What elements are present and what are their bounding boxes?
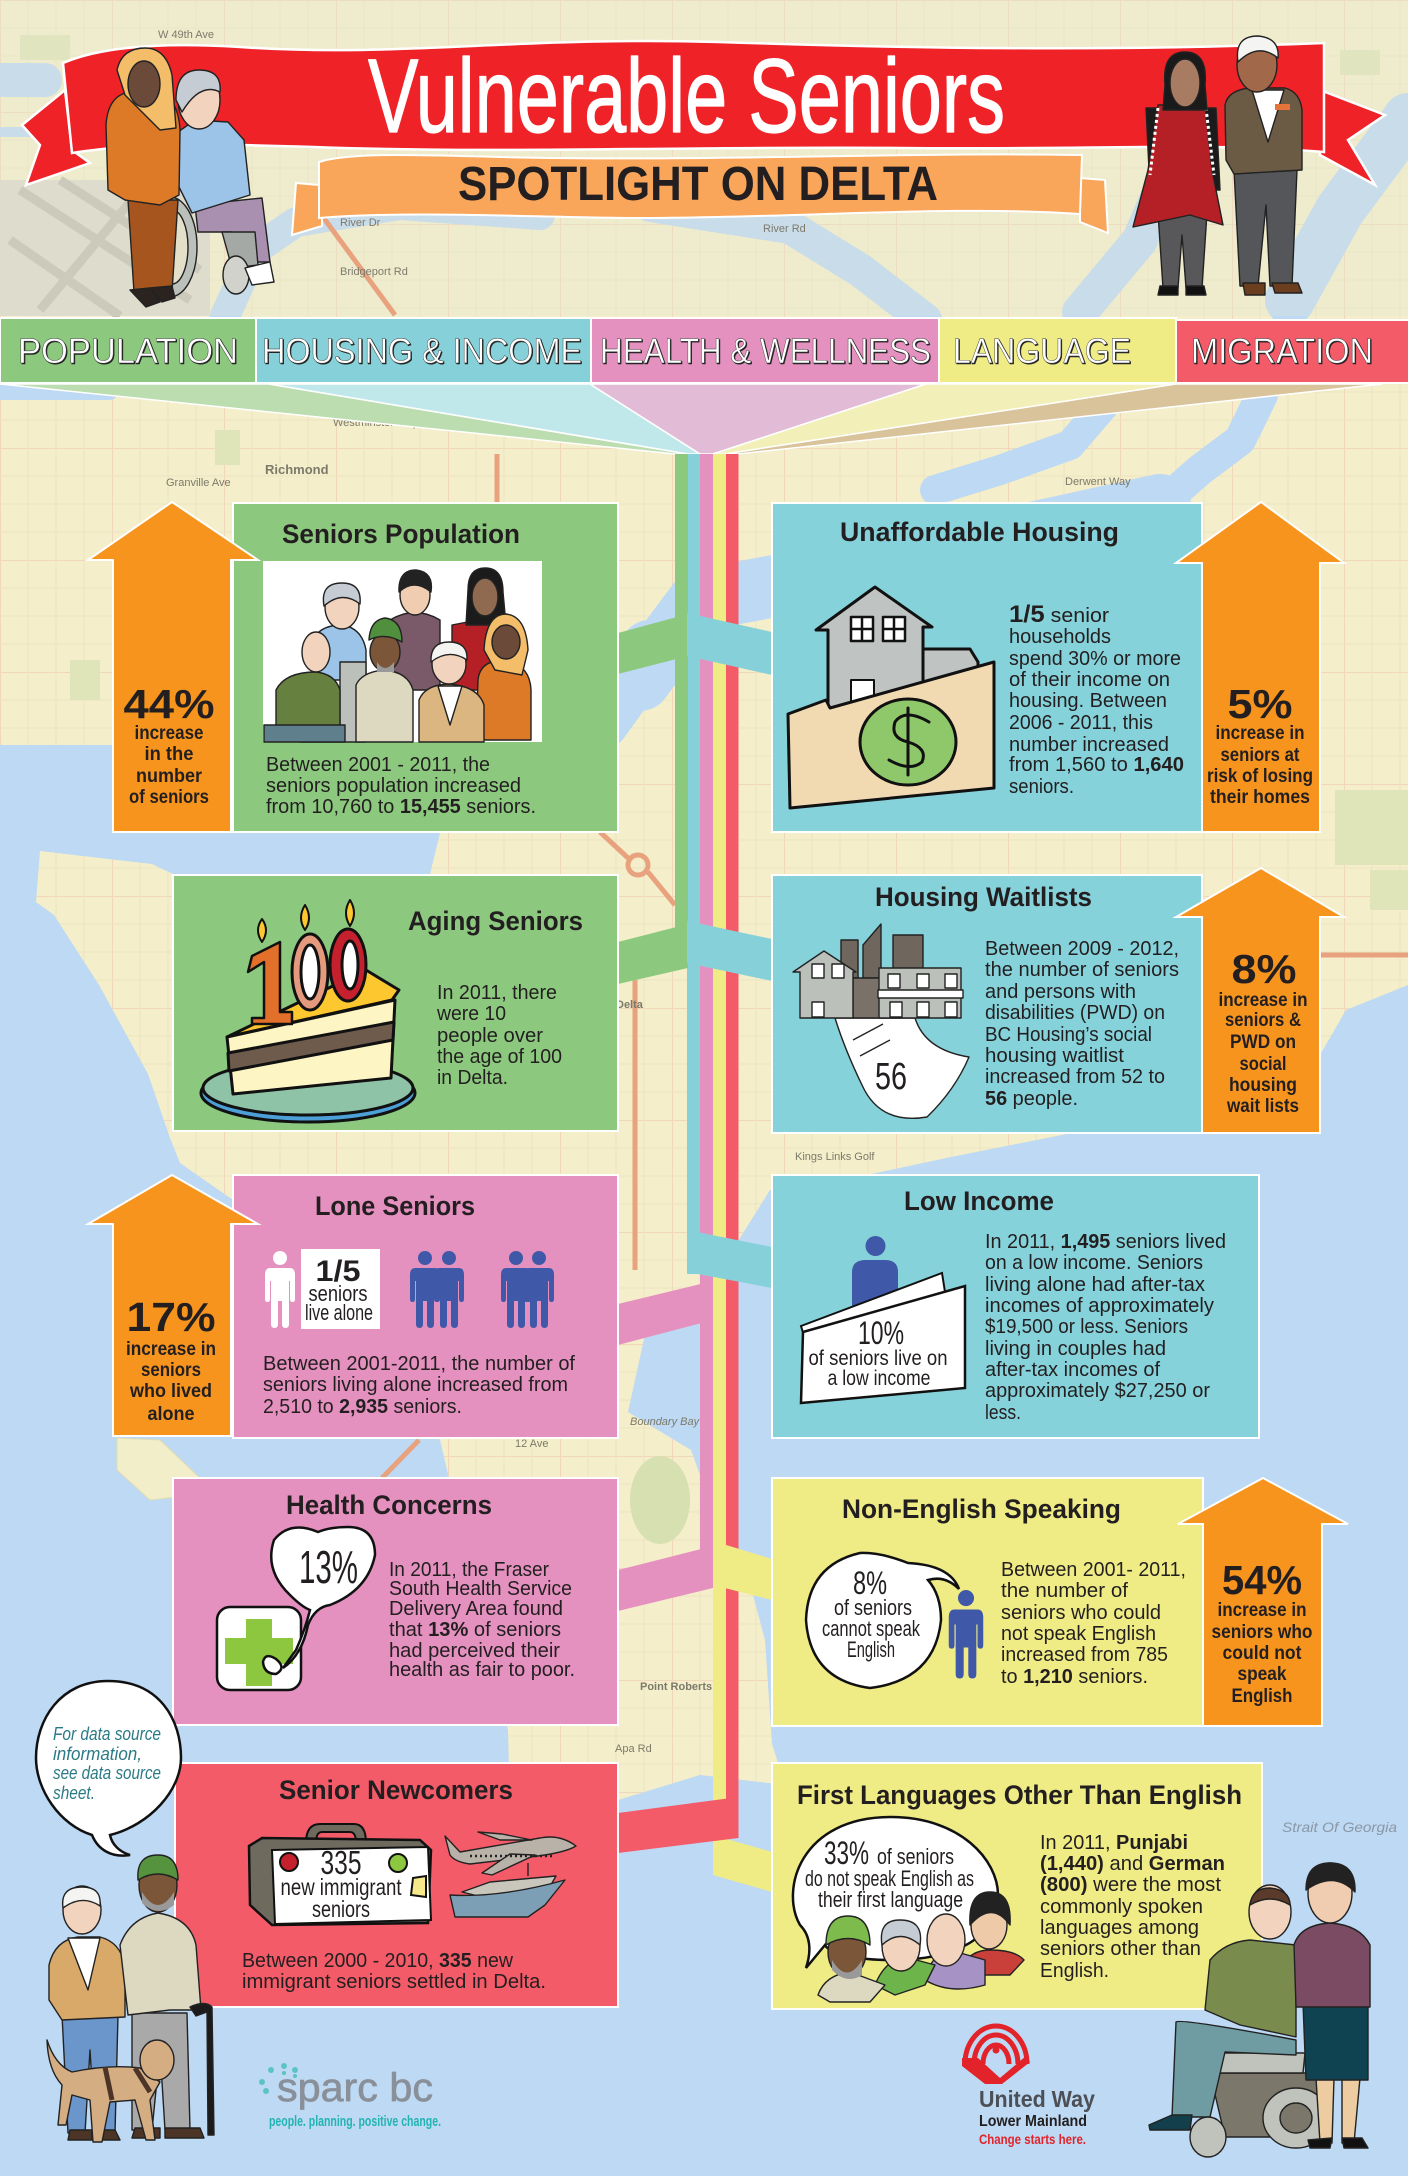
icon: one in five seniors: live alone: [305, 1300, 373, 1325]
body text: languages among: [1040, 1917, 1199, 1939]
body text: 1/5 senior: [1009, 601, 1109, 628]
body text: [389, 1559, 575, 1681]
category: population: POPULATION: [18, 332, 238, 371]
body text: housing waitlist: [985, 1045, 1124, 1067]
body text: [985, 938, 1179, 1110]
panel: Non-English Speaking: [772, 1478, 1203, 1726]
heading: Housing Waitlists: [875, 882, 1092, 912]
body text: living alone had after-tax: [985, 1274, 1205, 1296]
speech bubble with heads: their first language: [818, 1887, 963, 1912]
body text: less.: [985, 1402, 1021, 1424]
body text: the number of seniors: [985, 959, 1179, 981]
body text: Delivery Area found: [389, 1598, 563, 1620]
icon: one in five seniors: 1/5: [316, 1255, 360, 1288]
icon: person behind wallet: a low income: [828, 1367, 930, 1390]
arrow: 8% increase: 8%: [1232, 946, 1296, 992]
body text: that 13% of seniors: [389, 1619, 561, 1641]
body text: had perceived their: [389, 1640, 560, 1662]
arrow: 17% increase: increase in: [126, 1339, 216, 1360]
body text: disabilities (PWD) on: [985, 1002, 1165, 1024]
heading: Unaffordable Housing: [840, 517, 1119, 547]
body text: number increased: [1009, 734, 1169, 756]
body text: of their income on: [1009, 669, 1170, 691]
arrow: 8% increase: social: [1240, 1054, 1286, 1075]
speech bubble with heads: 33%: [824, 1835, 869, 1871]
fan connectors from categories to trunk: [0, 384, 1382, 454]
body text: 56 people.: [985, 1088, 1078, 1110]
body text: incomes of approximately: [985, 1295, 1214, 1317]
illustration: man with guide dog: [49, 1886, 125, 2140]
body text: $19,500 or less. Seniors: [985, 1316, 1188, 1338]
body text: [263, 1353, 575, 1418]
heading: Low Income: [904, 1186, 1054, 1216]
map background: Apa Rd: [615, 1743, 652, 1755]
body text: were 10: [436, 1003, 506, 1025]
body text: and persons with: [985, 981, 1136, 1003]
icon: heart speech bubble: 13%: [299, 1541, 358, 1593]
body text: seniors who could: [1001, 1602, 1161, 1624]
arrow: 54% increase: speak: [1238, 1664, 1287, 1685]
body text: seniors population increased: [266, 775, 521, 797]
icon: person behind wallet: [801, 1236, 965, 1403]
body text: living in couples had: [985, 1338, 1166, 1360]
map background: Kings Links Golf: [795, 1151, 875, 1163]
icon: suitcase: 335: [320, 1844, 362, 1881]
arrow: 54% increase: increase in: [1218, 1600, 1306, 1621]
arrow: 5% increase: 5%: [1228, 681, 1292, 727]
arrow: 54% increase: 54%: [1222, 1557, 1302, 1603]
central colour trunk: [675, 454, 738, 1875]
panel: Housing Waitlists: [772, 875, 1202, 1133]
body text: seniors other than: [1040, 1938, 1201, 1960]
category: health and wellness: [591, 318, 939, 383]
arrow: 8% increase: [1176, 868, 1344, 1133]
icon: homes and waitlist paper: 56: [875, 1056, 907, 1098]
icon: speech bubble: English: [847, 1637, 895, 1662]
body text: from 1,560 to 1,640: [1009, 754, 1184, 776]
body text: households: [1009, 626, 1111, 648]
title: Vulnerable Seniors: [368, 38, 1005, 155]
arrow: 17% increase: 17%: [126, 1294, 216, 1340]
arrow: 5% increase: increase in: [1216, 723, 1304, 744]
arrow: 8% increase: seniors &: [1225, 1010, 1301, 1031]
arrow: 8% increase: PWD on: [1230, 1032, 1296, 1053]
arrow: 44% increase: [88, 502, 258, 832]
category: health and wellness: HEALTH & WELLNESS: [600, 332, 931, 371]
arrow: 8% increase: increase in: [1218, 990, 1308, 1011]
icon: ship: [450, 1863, 565, 1917]
body text: increased from 785: [1001, 1644, 1168, 1666]
map background: Boundary Bay: [630, 1416, 701, 1428]
logo: United Way: [962, 2026, 1095, 2147]
group illustration: [263, 561, 542, 742]
body text: commonly spoken: [1040, 1896, 1203, 1918]
arrow: 44% increase: in the: [144, 744, 194, 765]
body text: seniors.: [1009, 776, 1074, 798]
panel: First Languages Other Than English: [772, 1763, 1262, 2009]
illustration: woman in red vest: [1133, 52, 1223, 295]
map background: Delta: [616, 999, 644, 1011]
icon: airplane: [445, 1832, 576, 1875]
map background: Richmond: [265, 462, 329, 477]
heading: Health Concerns: [286, 1490, 492, 1520]
branch connectors: [618, 613, 772, 1892]
callout: data source note: sheet.: [53, 1783, 95, 1803]
body text: spend 30% or more: [1009, 648, 1181, 670]
body text: health as fair to poor.: [389, 1659, 575, 1681]
icon: house in wallet: [788, 587, 994, 808]
body text: housing. Between: [1009, 690, 1167, 712]
map background: Strait Of Georgia: [1282, 1819, 1397, 1835]
illustration: woman in wheelchair: [143, 70, 274, 297]
body text: Between 2000 - 2010, 335 new: [242, 1950, 514, 1972]
map background: 12 Ave: [515, 1438, 548, 1450]
speech bubble with heads: of seniors: [877, 1844, 954, 1869]
body text: [985, 1231, 1226, 1424]
arrow: 8% increase: housing: [1229, 1075, 1297, 1096]
red title banner: [22, 38, 1385, 185]
panel: Aging Seniors: [173, 875, 618, 1131]
body text: [436, 982, 562, 1089]
arrow: 44% increase: number: [136, 766, 203, 787]
body text: the age of 100: [437, 1046, 562, 1068]
arrow: 17% increase: alone: [148, 1404, 194, 1425]
category: housing and income: [256, 318, 591, 383]
heading: Senior Newcomers: [279, 1775, 513, 1805]
illustration: woman in hijab: [106, 48, 180, 307]
callout: data source note: For data source: [53, 1724, 161, 1744]
category bars: [0, 318, 1408, 383]
icon: speech bubble: [806, 1553, 959, 1688]
arrow: 5% increase: risk of losing: [1207, 766, 1313, 787]
body text: approximately $27,250 or: [985, 1380, 1210, 1402]
map background: Westminster Hwy: [333, 417, 419, 429]
logo: United Way: Lower Mainland: [979, 2113, 1087, 2130]
body text: seniors living alone increased from: [263, 1374, 568, 1396]
map background: Bridgeport Rd: [340, 266, 408, 278]
icon: one in five seniors: seniors: [308, 1281, 368, 1306]
speech bubble with heads: [793, 1817, 1024, 2002]
icon: person: [949, 1590, 983, 1679]
panel: Lone Seniors: [233, 1175, 618, 1438]
icon: medical box: [217, 1607, 301, 1690]
map background: Derwent Way: [1065, 476, 1131, 488]
body text: immigrant seniors settled in Delta.: [242, 1971, 546, 1993]
icon: homes and waitlist paper: [793, 924, 969, 1118]
arrow: 54% increase: English: [1232, 1686, 1292, 1707]
body text: Between 2001- 2011,: [1001, 1559, 1186, 1581]
body text: [1001, 1559, 1186, 1688]
heading: First Languages Other Than English: [797, 1780, 1242, 1810]
body text: on a low income. Seniors: [985, 1252, 1203, 1274]
arrow: 44% increase: of seniors: [129, 787, 209, 808]
map background: River Dr: [340, 217, 381, 229]
body text: In 2011, there: [437, 982, 557, 1004]
arrow: 8% increase: wait lists: [1226, 1096, 1299, 1117]
body text: English.: [1040, 1960, 1109, 1982]
category: population: [0, 318, 256, 383]
icon: suitcase: new immigrant: [280, 1874, 402, 1900]
body text: 2,510 to 2,935 seniors.: [263, 1396, 462, 1418]
subtitle: SPOTLIGHT ON DELTA: [458, 158, 938, 211]
body text: not speak English: [1001, 1623, 1156, 1645]
body text: increased from 52 to: [985, 1066, 1165, 1088]
callout: data source note: see data source: [53, 1763, 161, 1783]
logo: United Way: United Way: [979, 2086, 1095, 2112]
category: migration: MIGRATION: [1191, 332, 1373, 371]
body text: In 2011, 1,495 seniors lived: [985, 1231, 1226, 1253]
category: migration: [1176, 320, 1408, 383]
panel: Low Income: [772, 1175, 1259, 1438]
illustration: man in power wheelchair: [1149, 1885, 1329, 2157]
illustration: guide dog: [47, 2040, 174, 2142]
body text: (800) were the most: [1040, 1874, 1221, 1896]
logo: United Way: Change starts here.: [979, 2132, 1086, 2147]
icon: suitcase: seniors: [312, 1896, 370, 1922]
map background: Point Roberts: [640, 1681, 712, 1693]
map background: River Rd: [763, 223, 806, 235]
illustration: woman in purple sweater: [1294, 1863, 1370, 2148]
orange subtitle banner: [292, 154, 1108, 235]
panel: Unaffordable Housing: [772, 503, 1202, 832]
body text: [242, 1950, 546, 1993]
logo: sparc bc: sparc bc: [277, 2066, 433, 2110]
arrow: 17% increase: [88, 1175, 258, 1436]
callout: data source note: information,: [53, 1744, 142, 1764]
illustration: man in brown cardigan: [1225, 36, 1302, 295]
icon: person behind wallet: 10%: [858, 1315, 904, 1351]
icon: suitcase: [249, 1824, 431, 1925]
icon: speech bubble: cannot speak: [822, 1616, 921, 1641]
heading: Lone Seniors: [315, 1191, 475, 1221]
icon: speech bubble: of seniors: [834, 1595, 912, 1620]
body text: [1040, 1832, 1225, 1982]
illustration: man with turban and cane: [120, 1855, 214, 2138]
arrow: 17% increase: who lived: [129, 1381, 212, 1402]
body text: BC Housing’s social: [985, 1024, 1152, 1046]
body text: [266, 754, 536, 818]
panel: Seniors Population: [233, 503, 618, 832]
body text: 2006 - 2011, this: [1009, 712, 1153, 734]
category: language: LANGUAGE: [953, 332, 1131, 371]
logo: sparc bc: people. planning. positive change.: [269, 2113, 441, 2130]
category: housing and income: HOUSING & INCOME: [262, 332, 582, 371]
body text: Between 2001 - 2011, the: [266, 754, 490, 776]
icon: birthday cake: [201, 900, 415, 1122]
body text: (1,440) and German: [1040, 1853, 1225, 1875]
arrow: 5% increase: their homes: [1210, 787, 1310, 808]
arrow: 5% increase: seniors at: [1220, 745, 1300, 766]
body text: in Delta.: [437, 1067, 508, 1089]
arrow: 54% increase: [1178, 1478, 1348, 1726]
body text: South Health Service: [389, 1578, 572, 1600]
arrow: 44% increase: increase: [134, 723, 204, 744]
icon: person behind wallet: of seniors live on: [808, 1347, 948, 1370]
arrow: 54% increase: seniors who: [1212, 1622, 1312, 1643]
speech bubble with heads: do not speak English as: [805, 1866, 974, 1891]
heading: Seniors Population: [282, 519, 520, 549]
heading: Non-English Speaking: [842, 1494, 1121, 1524]
heading: Aging Seniors: [408, 906, 583, 936]
body text: after-tax incomes of: [985, 1359, 1160, 1381]
icon: heart speech bubble: [271, 1527, 375, 1668]
body text: Between 2009 - 2012,: [985, 938, 1179, 960]
panel: Health Concerns: [173, 1478, 618, 1725]
body text: [1009, 601, 1184, 798]
body text: In 2011, the Fraser: [389, 1559, 549, 1581]
arrow: 17% increase: seniors: [141, 1360, 201, 1381]
panel: Senior Newcomers: [175, 1763, 618, 2007]
arrow: 44% increase: 44%: [124, 681, 214, 727]
arrow: 5% increase: [1176, 502, 1344, 832]
logo: sparc bc: [259, 2063, 441, 2130]
body text: to 1,210 seniors.: [1001, 1666, 1148, 1688]
map background: Granville Ave: [166, 477, 231, 489]
arrow: 54% increase: could not: [1222, 1643, 1302, 1664]
body text: the number of: [1001, 1580, 1128, 1602]
category: language: [939, 318, 1176, 383]
icon: one in five seniors: [265, 1249, 554, 1329]
body text: In 2011, Punjabi: [1040, 1832, 1188, 1854]
map background: W 49th Ave: [158, 29, 214, 41]
callout: data source note: [36, 1681, 181, 1856]
body text: from 10,760 to 15,455 seniors.: [266, 796, 536, 818]
body text: people over: [437, 1025, 543, 1047]
body text: Between 2001-2011, the number of: [263, 1353, 575, 1375]
icon: speech bubble: 8%: [853, 1565, 887, 1601]
